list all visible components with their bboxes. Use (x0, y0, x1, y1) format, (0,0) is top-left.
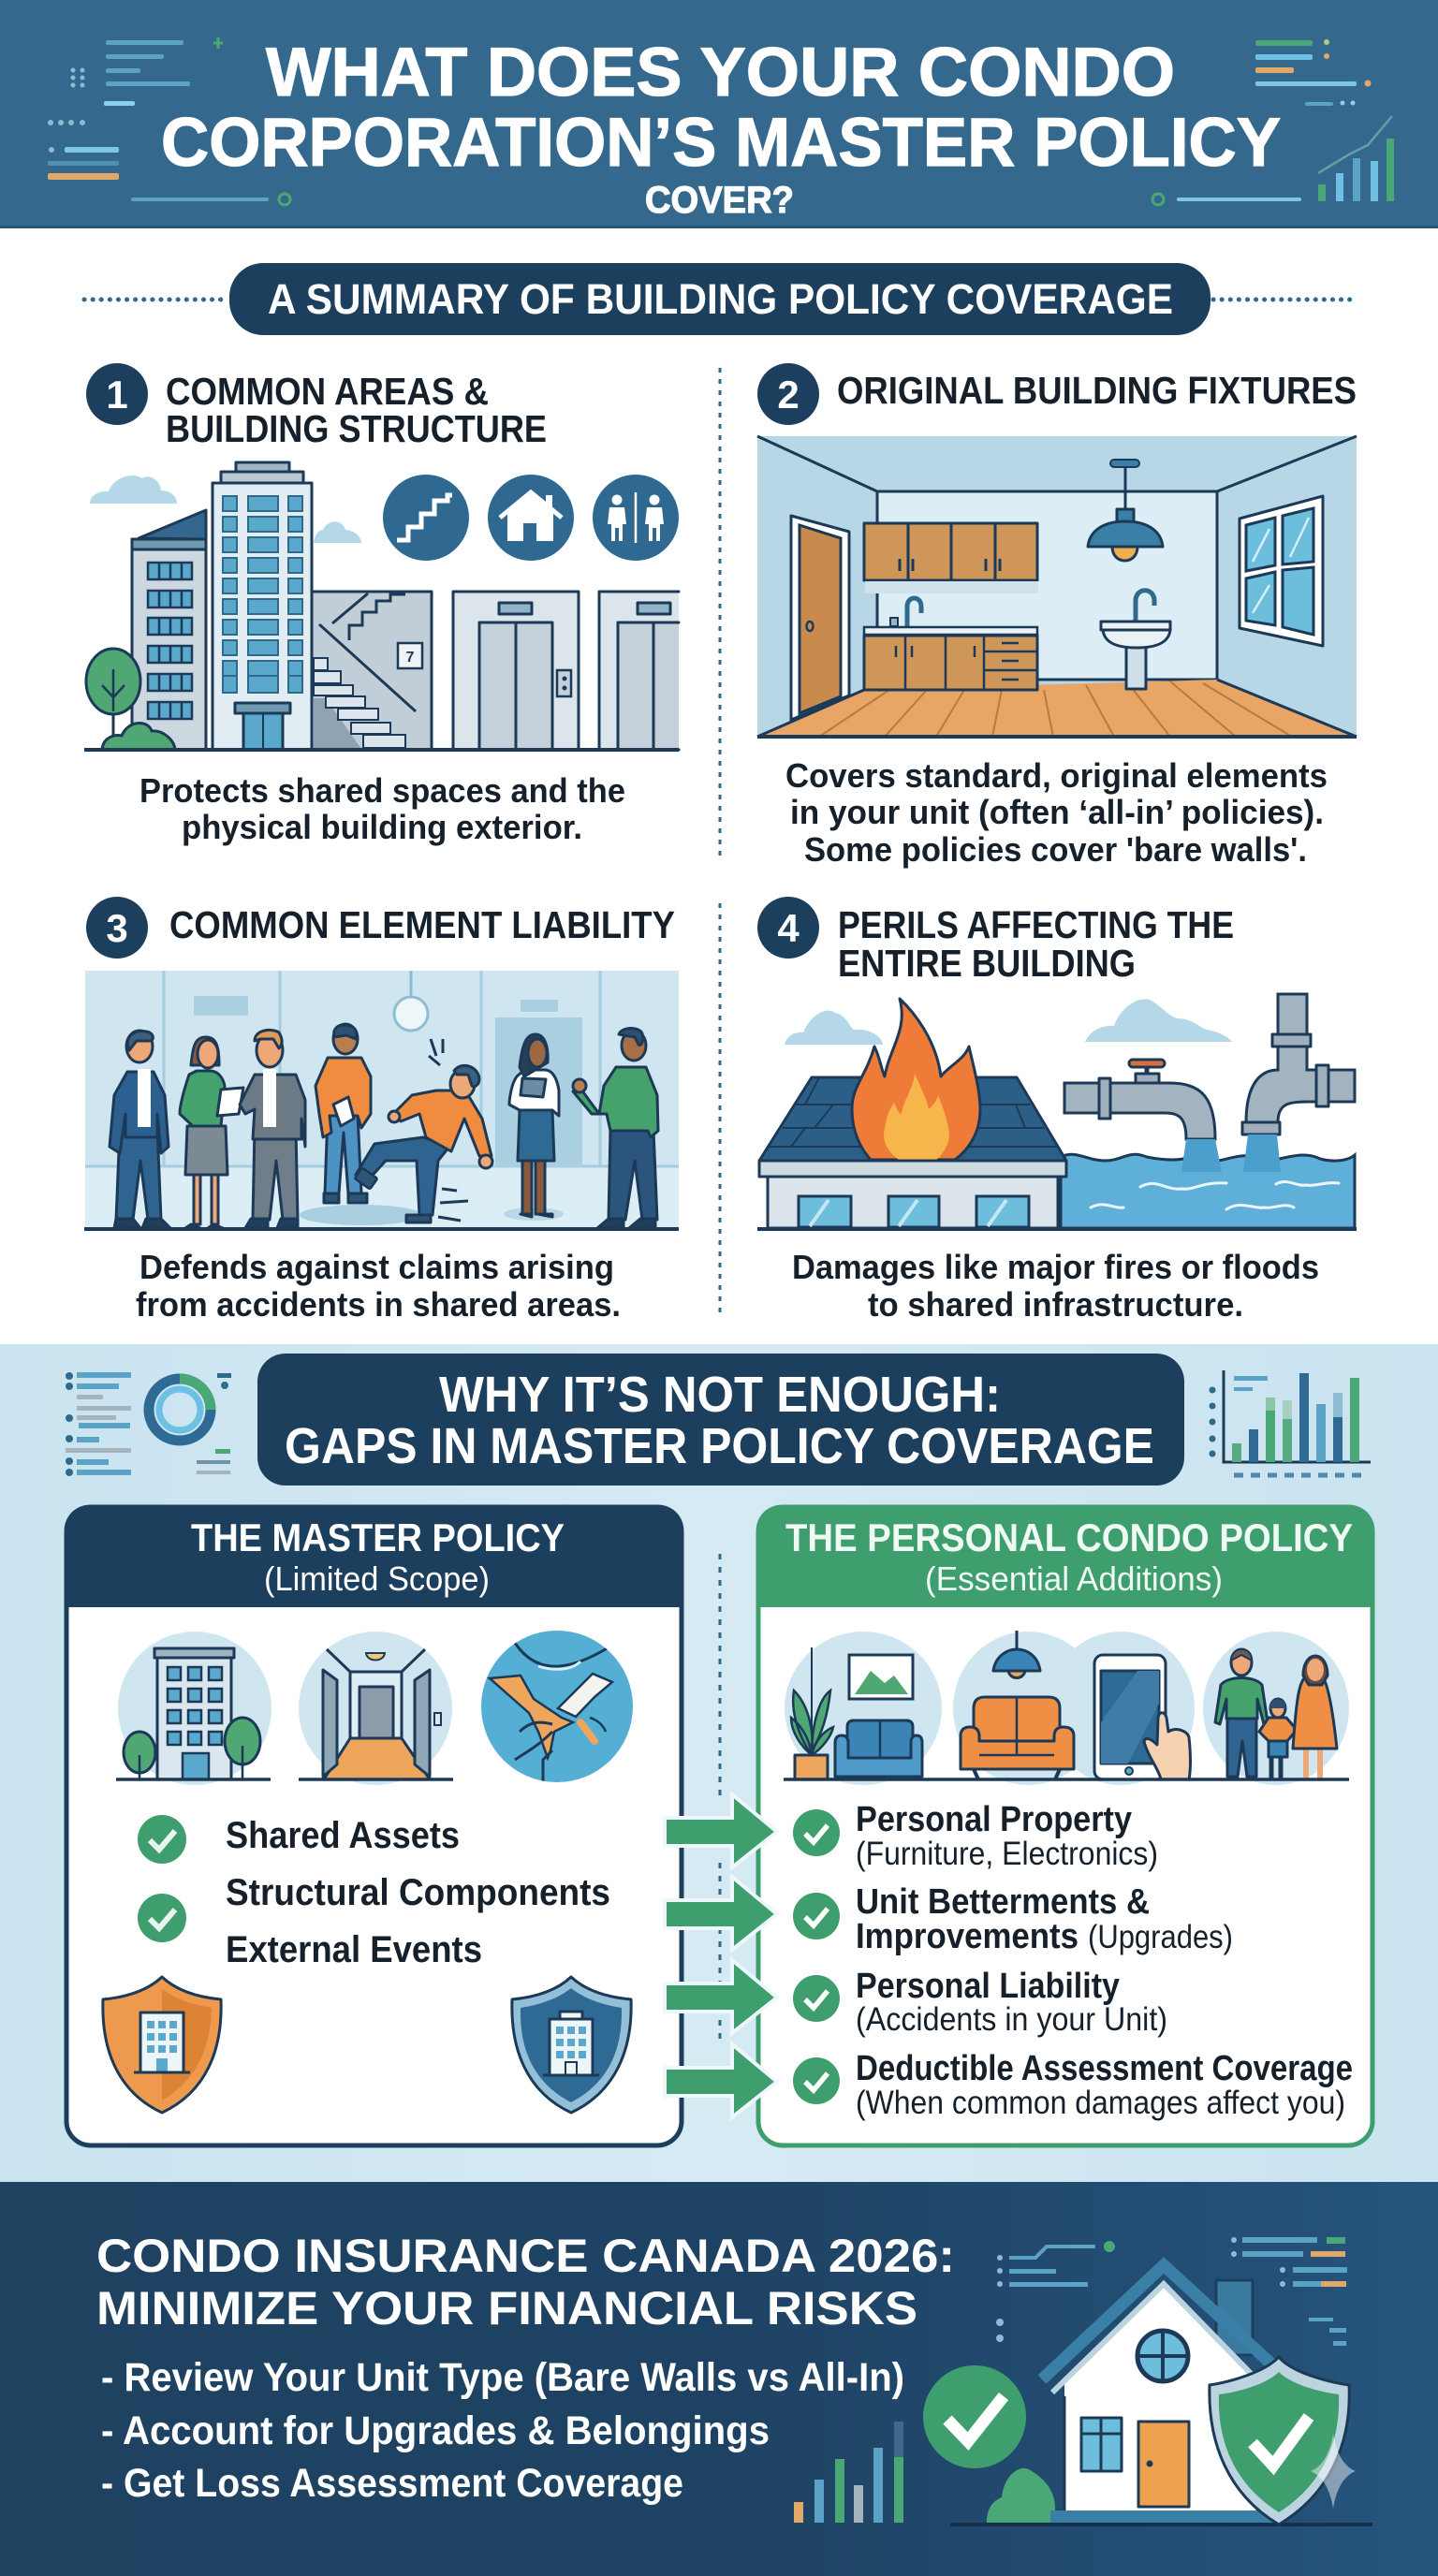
person 5 falling (355, 1039, 492, 1222)
heading 2: ORIGINAL BUILDING FIXTURES (837, 369, 1357, 412)
decorative data graphic left (66, 1372, 231, 1476)
personal coverage text: Deductible Assessment Coverage (856, 2049, 1353, 2088)
heading 4: ENTIRE BUILDING (838, 942, 1136, 985)
personal coverage text: Personal Liability (856, 1967, 1120, 2006)
number badge 4 (757, 897, 819, 959)
footer bar chart (794, 2422, 903, 2523)
footer checklist: - Review Your Unit Type (Bare Walls vs All-In) (101, 2355, 904, 2400)
banner heading (257, 1354, 1184, 1486)
heading 1: BUILDING STRUCTURE (166, 407, 547, 450)
caption 3: Defends against claims arising (139, 1248, 614, 1286)
person 7 (573, 1028, 658, 1228)
caption 3 (136, 1248, 621, 1324)
main title: COVER? (645, 180, 794, 221)
caption 1 (139, 771, 625, 846)
heading 4 (838, 903, 1234, 985)
phone with hand (1094, 1655, 1191, 1779)
illustration: fire and flood (757, 994, 1357, 1231)
icon: building (116, 1632, 271, 1785)
pendant lamp (993, 1631, 1040, 1677)
master coverage list: Structural Components (226, 1872, 610, 1913)
main title: CORPORATION’S MASTER POLICY (161, 105, 1281, 181)
caption 2: Some policies cover 'bare walls'. (804, 830, 1307, 869)
footer heading: CONDO INSURANCE CANADA 2026: (96, 2230, 955, 2282)
master policy heading: THE MASTER POLICY (191, 1515, 565, 1559)
main title (161, 35, 1281, 221)
main title: WHAT DOES YOUR CONDO (266, 35, 1175, 110)
heading 1 (166, 370, 547, 450)
icon: washroom (593, 475, 679, 561)
number badge 1 (86, 363, 148, 425)
master policy heading (191, 1515, 565, 1598)
check item 1 (138, 1815, 186, 1864)
panel 1: common areas (84, 363, 679, 846)
icon: stairs (383, 475, 469, 561)
icon: blue shield (512, 1977, 631, 2113)
vertical dotted divider (719, 368, 721, 1314)
personal coverage text: (When common damages affect you) (856, 2085, 1345, 2121)
heading 3: COMMON ELEMENT LIABILITY (169, 903, 675, 946)
orange sofa (961, 1697, 1074, 1779)
personal coverage text: (Upgrades) (1088, 1919, 1233, 1955)
master coverage list: External Events (226, 1929, 482, 1970)
illustration: insured house (950, 2265, 1372, 2525)
section heading pill: A SUMMARY OF BUILDING POLICY COVERAGE (268, 275, 1173, 323)
master coverage list: Shared Assets (226, 1815, 460, 1856)
section heading pill (84, 263, 1357, 335)
decorative bar chart right (1210, 1370, 1371, 1475)
panel 4: perils (757, 897, 1357, 1324)
caption 2: Covers standard, original elements (785, 756, 1328, 795)
center dotted divider (719, 1554, 721, 2042)
person 6 (509, 1034, 559, 1217)
caption 1: physical building exterior. (182, 808, 582, 846)
arrow 4 (665, 2044, 777, 2117)
decorative data marks (996, 2237, 1347, 2346)
family (1215, 1649, 1337, 1779)
footer checklist: - Account for Upgrades & Belongings (101, 2408, 770, 2453)
panel 2: original fixtures (757, 363, 1357, 869)
footer checklist (101, 2355, 904, 2506)
icon: corridor (299, 1632, 453, 1785)
personal coverage text: Personal Property (856, 1800, 1132, 1839)
personal coverage text: (Accidents in your Unit) (856, 2001, 1167, 2038)
header decoration right (1152, 39, 1394, 205)
banner heading: GAPS IN MASTER POLICY COVERAGE (285, 1418, 1154, 1474)
check item: betterments (793, 1893, 840, 1939)
picture frame (849, 1655, 913, 1699)
number badge 4: 4 (777, 906, 800, 950)
panel 3: common element liability (84, 897, 679, 1324)
arrow 3 (665, 1960, 777, 2033)
master coverage list (226, 1815, 610, 1970)
footer heading (96, 2230, 955, 2334)
caption 3: from accidents in shared areas. (136, 1285, 621, 1324)
header decoration left (48, 37, 290, 205)
person 3 (240, 1030, 305, 1228)
plant (791, 1647, 833, 1779)
personal policy heading (785, 1515, 1353, 1598)
caption 2 (785, 756, 1328, 869)
header banner (0, 0, 1438, 228)
caption 2: in your unit (often ‘all-in’ policies). (790, 793, 1324, 831)
illustration: slip and fall in lobby (84, 971, 679, 1231)
number badge 2: 2 (777, 373, 800, 417)
caption 1: Protects shared spaces and the (139, 771, 625, 810)
personal policy heading: THE PERSONAL CONDO POLICY (785, 1515, 1353, 1559)
illustration: room interior (757, 436, 1357, 739)
personal policy heading: (Essential Additions) (925, 1559, 1223, 1598)
check item: personal property (793, 1809, 840, 1856)
illustration: building, stairs and elevators (84, 462, 679, 752)
illustration: building, stairs and elevators: 7 (406, 650, 415, 666)
caption 4: Damages like major fires or floods (792, 1248, 1319, 1286)
footer heading: MINIMIZE YOUR FINANCIAL RISKS (96, 2282, 917, 2334)
arrow 2 (665, 1877, 777, 1950)
footer checklist: - Get Loss Assessment Coverage (101, 2461, 683, 2506)
check item 2 (138, 1894, 186, 1942)
number badge 3 (86, 897, 148, 959)
caption 4: to shared infrastructure. (868, 1285, 1243, 1324)
personal coverage text: Improvements (856, 1917, 1078, 1956)
personal coverage text (856, 1800, 1353, 2121)
blue sofa (835, 1720, 922, 1777)
panel: the personal condo policy (756, 1505, 1374, 2145)
icon: house (488, 475, 574, 561)
icon: large check badge (923, 2365, 1026, 2468)
footer section (0, 2182, 1438, 2576)
check item: deductible (793, 2057, 840, 2104)
heading 4: PERILS AFFECTING THE (838, 903, 1234, 946)
illustration: belongings and family (784, 1631, 1349, 1785)
number badge 3: 3 (106, 906, 128, 950)
section: why it's not enough (0, 1344, 1438, 2182)
caption 4 (792, 1248, 1319, 1324)
icon: orange shield (103, 1977, 221, 2113)
banner heading: WHY IT’S NOT ENOUGH: (439, 1367, 1001, 1423)
person 1 (110, 1031, 170, 1228)
personal coverage text: Unit Betterments & (856, 1882, 1150, 1922)
person 4 (315, 1024, 371, 1203)
master policy heading: (Limited Scope) (264, 1559, 490, 1598)
number badge 2 (757, 363, 819, 425)
panel: the master policy (65, 1505, 683, 2145)
check item: liability (793, 1975, 840, 2022)
arrow 1 (665, 1794, 777, 1867)
personal coverage text: (Furniture, Electronics) (856, 1836, 1158, 1872)
heading 1: COMMON AREAS & (166, 370, 489, 413)
icon: torn coverage (481, 1631, 633, 1783)
number badge 1: 1 (106, 373, 128, 417)
person 2 (180, 1037, 243, 1228)
